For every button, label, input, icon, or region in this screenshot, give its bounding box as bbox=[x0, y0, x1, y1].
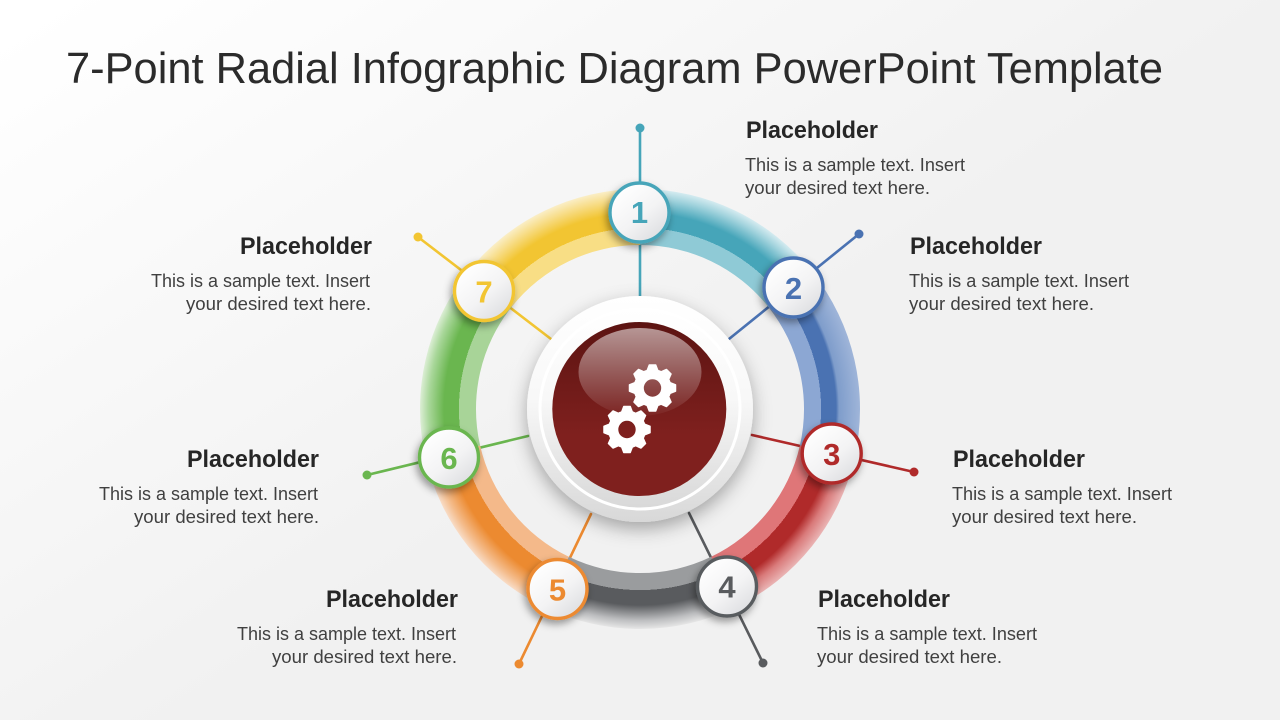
hub white ring bbox=[540, 309, 740, 509]
ring segment: yellow bbox=[468, 189, 640, 307]
text block 6 bbox=[99, 446, 319, 527]
text block 3: This is a sample text. Insert bbox=[952, 484, 1172, 504]
connector 7 bbox=[414, 232, 551, 339]
text block 7: your desired text here. bbox=[186, 294, 371, 314]
text block 5: your desired text here. bbox=[272, 647, 457, 667]
connector 2 bbox=[729, 230, 864, 339]
text block 5: Placeholder bbox=[326, 586, 458, 613]
text block 7: This is a sample text. Insert bbox=[151, 271, 370, 291]
node 4 bbox=[698, 557, 756, 616]
node 7: 7 bbox=[475, 274, 493, 310]
node 5: 5 bbox=[549, 572, 566, 608]
ring segment: green bbox=[420, 272, 512, 458]
text block 3 bbox=[952, 446, 1172, 527]
text block 3: your desired text here. bbox=[952, 507, 1137, 527]
node 7 bbox=[454, 262, 514, 320]
text block 2: Placeholder bbox=[910, 233, 1042, 260]
hub red sphere bbox=[552, 322, 726, 496]
node 1 bbox=[610, 183, 669, 242]
ring segment: gray bbox=[544, 557, 736, 629]
connector 6 bbox=[362, 436, 528, 480]
icon: gears bbox=[604, 365, 676, 452]
gear lower bbox=[604, 406, 650, 452]
connector 5 bbox=[514, 514, 591, 668]
hub gloss bbox=[578, 328, 702, 416]
text block 6: Placeholder bbox=[187, 446, 319, 473]
text block 4: your desired text here. bbox=[817, 647, 1002, 667]
text block 7 bbox=[151, 233, 372, 314]
text block 1: your desired text here. bbox=[745, 178, 930, 198]
title: 7-Point Radial Infographic Diagram PowerPoint Template bbox=[66, 44, 1163, 93]
text block 4: This is a sample text. Insert bbox=[817, 624, 1037, 644]
node 3: 3 bbox=[823, 437, 840, 472]
node 3 bbox=[802, 424, 861, 483]
text block 1: This is a sample text. Insert bbox=[745, 155, 965, 175]
text block 7: Placeholder bbox=[240, 233, 372, 260]
node 1: 1 bbox=[631, 195, 648, 230]
ring segment: red bbox=[711, 446, 854, 607]
hub outer disc bbox=[527, 296, 753, 522]
text block 4 bbox=[817, 586, 1037, 667]
text block 1: Placeholder bbox=[746, 117, 878, 144]
node 6 bbox=[420, 428, 478, 487]
connector 1 bbox=[636, 124, 644, 296]
text block 2 bbox=[909, 233, 1129, 314]
connector lines and end dots bbox=[362, 124, 918, 668]
node 4: 4 bbox=[718, 570, 736, 604]
text block 2: your desired text here. bbox=[909, 294, 1094, 314]
ring segment: orange bbox=[426, 446, 569, 607]
node 2 bbox=[764, 258, 823, 317]
connector 4 bbox=[689, 513, 768, 668]
ring segment: teal bbox=[640, 189, 812, 307]
text block 6: This is a sample text. Insert bbox=[99, 484, 318, 504]
center hub bbox=[527, 296, 753, 522]
text block 5: This is a sample text. Insert bbox=[237, 624, 456, 644]
text block 1 bbox=[745, 117, 965, 198]
radial ring bbox=[420, 189, 860, 629]
text block 3: Placeholder bbox=[953, 446, 1085, 473]
node 5 bbox=[528, 560, 587, 618]
node 2: 2 bbox=[785, 271, 802, 306]
ring segment: blue bbox=[768, 272, 860, 458]
text block 6: your desired text here. bbox=[134, 507, 319, 527]
node 6: 6 bbox=[440, 441, 458, 476]
connector 3 bbox=[752, 435, 918, 476]
gear upper bbox=[630, 365, 676, 411]
text block 2: This is a sample text. Insert bbox=[909, 271, 1129, 291]
text block 5 bbox=[237, 586, 458, 667]
text block 4: Placeholder bbox=[818, 586, 950, 613]
